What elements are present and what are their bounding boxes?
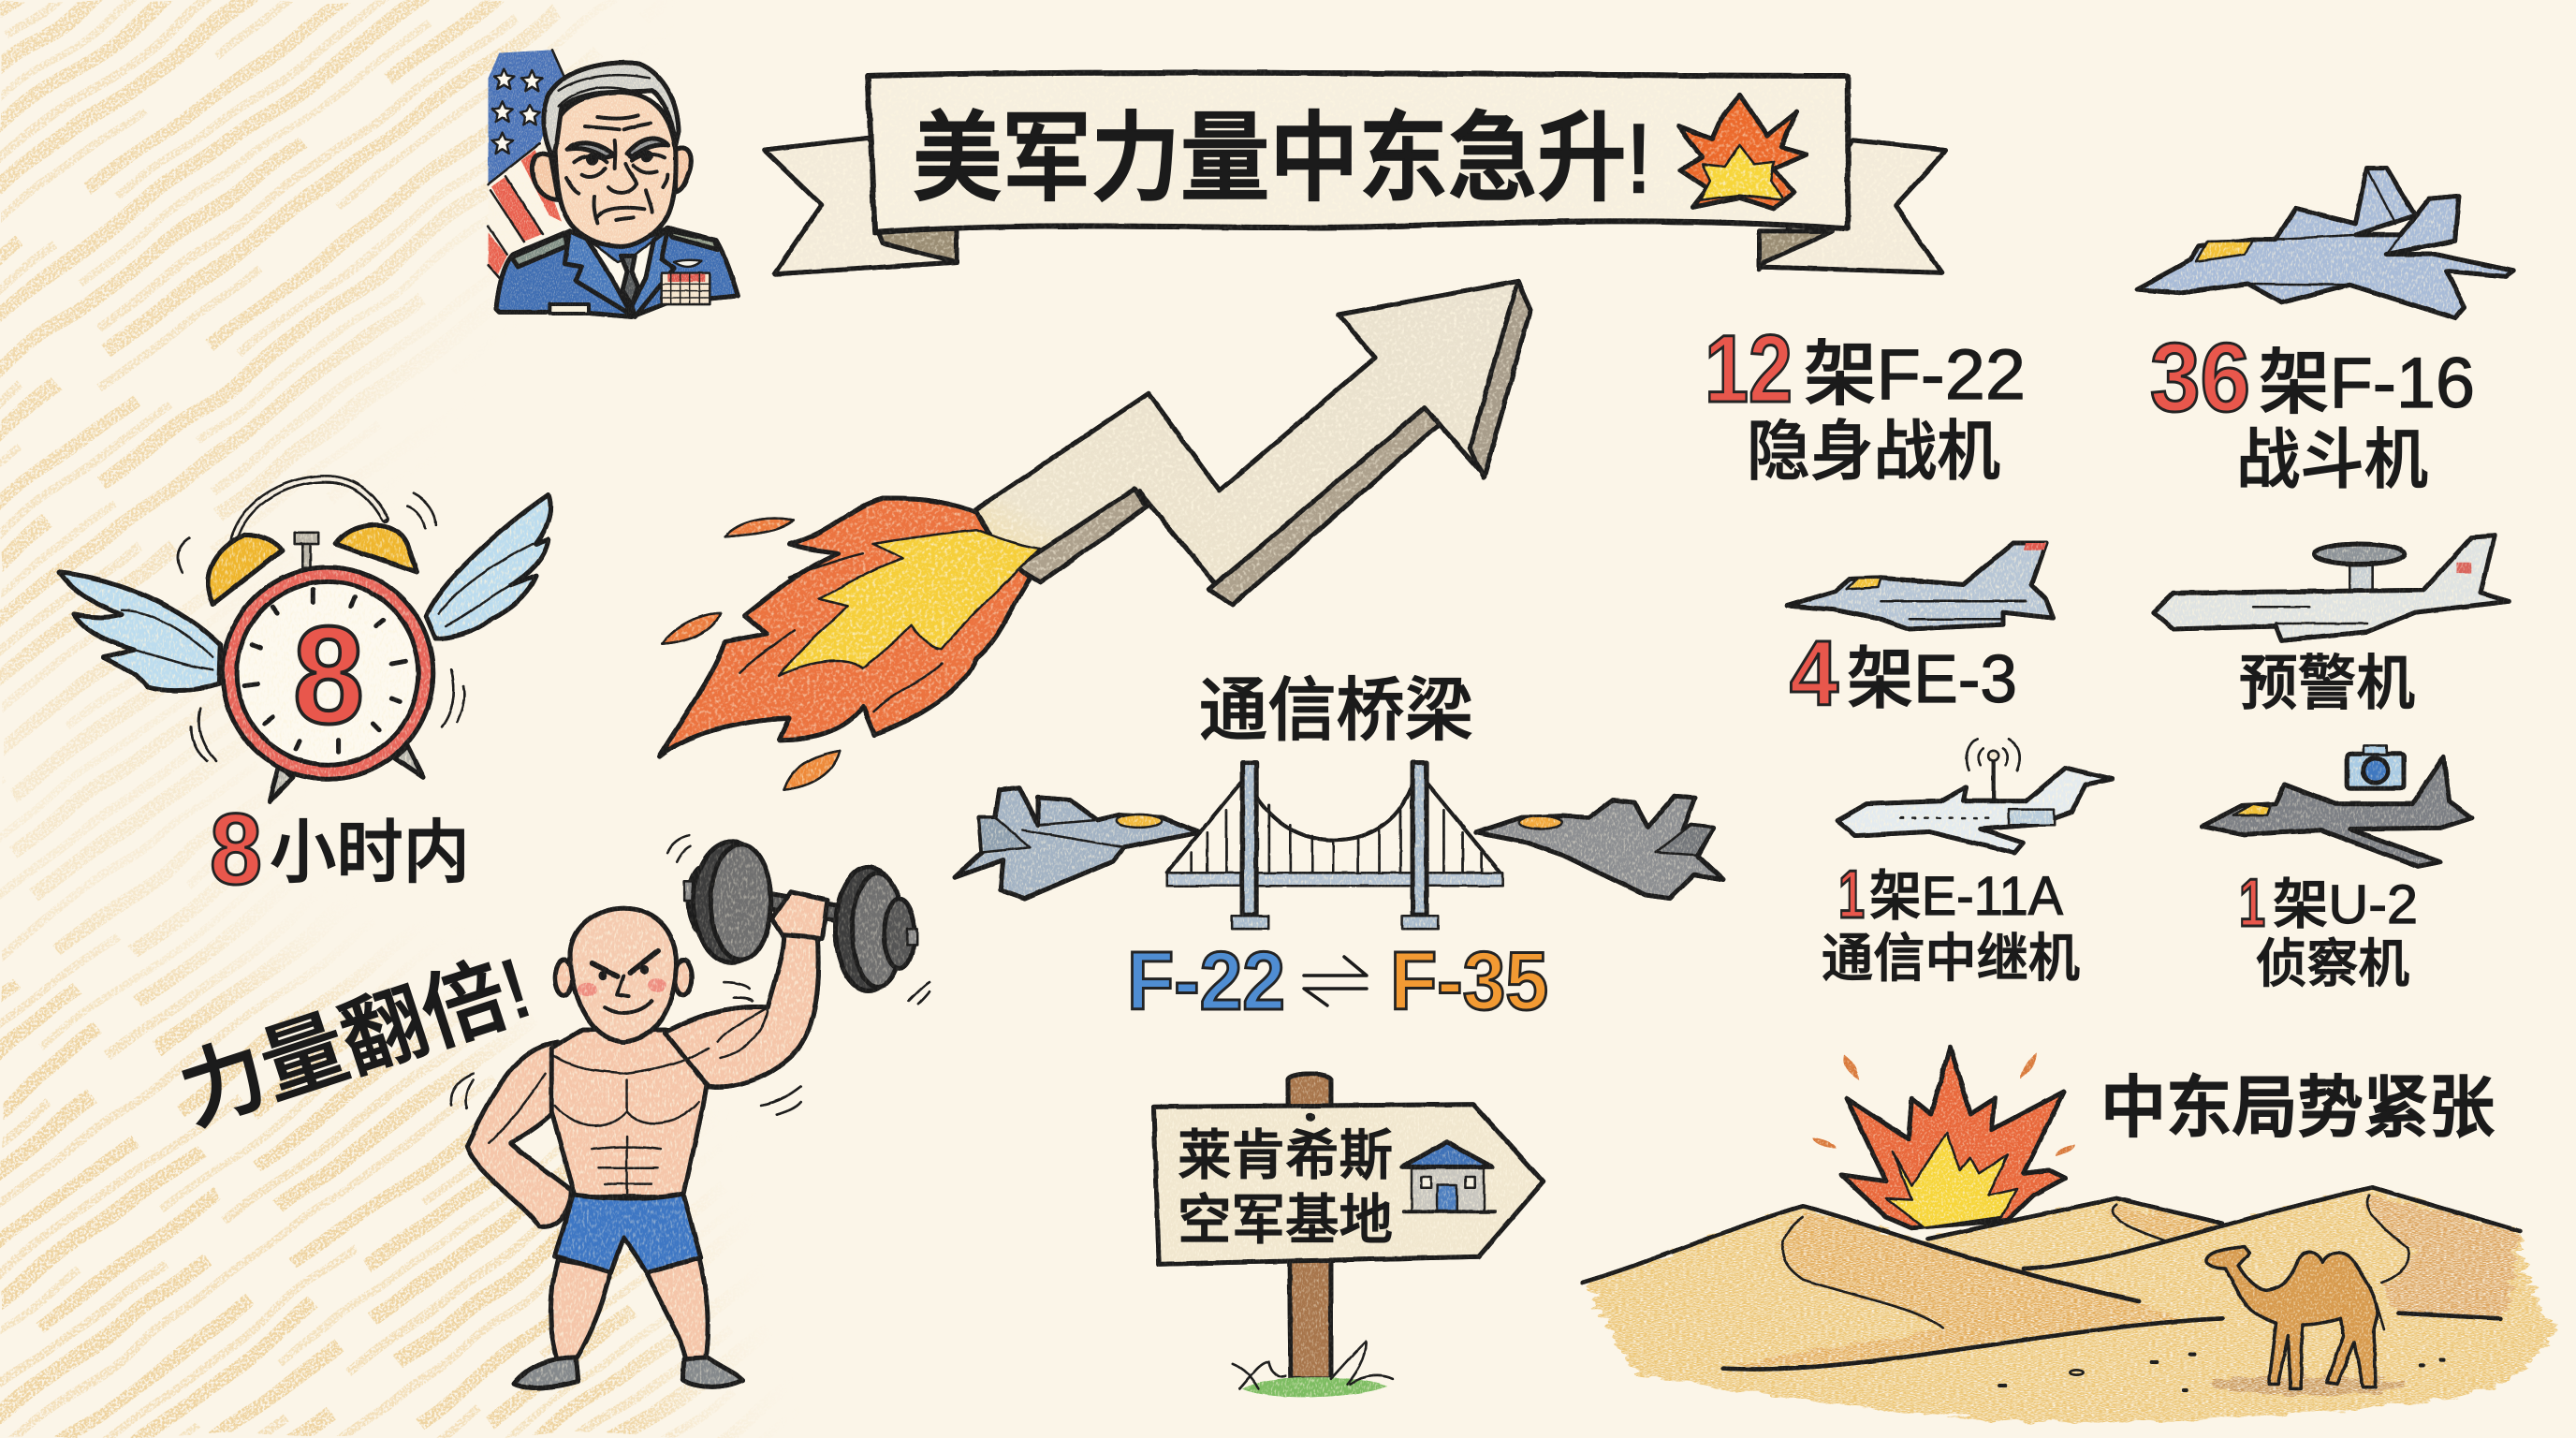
label: 架E-3: 架E-3 <box>1847 642 2017 717</box>
dune lines and camel <box>1582 1187 2520 1390</box>
label: 1架E-11A 通信中继机: 通信中继机 <box>1822 929 2080 988</box>
uniform <box>496 227 738 316</box>
bridge with two jets <box>955 763 1723 929</box>
E-11A relay plane illustration <box>1837 739 2113 853</box>
general portrait with flag <box>489 50 738 316</box>
label: 12架F-22 隐身战机 <box>1705 315 2026 488</box>
flying alarm clock <box>60 479 550 801</box>
grass <box>1242 1377 1387 1397</box>
feet <box>270 765 293 801</box>
label: F-22 ⇌ F-35 <box>1127 934 1548 1027</box>
label: 1架E-11A 通信中继机: 架E-11A <box>1869 866 2063 927</box>
flame flakes lower <box>783 751 840 790</box>
label: 12架F-22 隐身战机: 12 <box>1705 315 1793 422</box>
label: F-22 ⇌ F-35: F-22 <box>1127 934 1285 1027</box>
flag <box>489 50 564 278</box>
motion lines <box>178 493 464 761</box>
face <box>555 92 676 246</box>
left arm <box>467 1042 572 1226</box>
icon: camera <box>2347 745 2404 788</box>
label: 1架U-2 侦察机: 1 <box>2239 866 2265 941</box>
pebbles <box>2000 1355 2444 1390</box>
bodybuilder with dumbbell <box>450 835 929 1387</box>
label: F-22 ⇌ F-35: F-35 <box>1390 934 1548 1027</box>
handle and bells <box>233 479 386 544</box>
label: 1架E-11A 通信中继机: 1 <box>1838 858 1865 932</box>
head <box>570 908 676 1042</box>
left wing <box>60 572 221 691</box>
sign text: 莱肯希斯 <box>1178 1125 1393 1186</box>
E-3 AWACS illustration <box>2154 536 2509 640</box>
sand dunes fill <box>1586 1187 2558 1422</box>
F-22 stealth fighter illustration <box>2137 169 2513 318</box>
torso <box>551 1030 714 1196</box>
F-16 fighter illustration <box>1787 543 2053 629</box>
hair <box>544 63 679 157</box>
label: 1架U-2 侦察机 <box>2239 866 2418 993</box>
shoes <box>514 1357 578 1387</box>
clock number 8: 8 <box>293 598 364 753</box>
flame <box>659 499 1040 756</box>
label: 36架F-16 战斗机: 架F-16 <box>2259 344 2475 423</box>
desert scene with explosion and camel <box>1582 1047 2558 1422</box>
rising arrow <box>972 281 1530 605</box>
face <box>593 950 658 976</box>
right wing <box>426 494 550 638</box>
label: 8小时内: 8 <box>210 792 262 905</box>
label: 12架F-22 隐身战机: 隐身战机 <box>1747 415 2000 488</box>
ears <box>532 154 559 199</box>
clock ring and face <box>223 567 433 779</box>
label: 1架U-2 侦察机: 架U-2 <box>2273 874 2418 935</box>
label: 8小时内 <box>210 792 470 905</box>
suspension bridge <box>1167 763 1503 929</box>
legs <box>550 1259 611 1360</box>
label: 36架F-16 战斗机: 36 <box>2150 324 2250 433</box>
icon: house <box>1412 1167 1484 1211</box>
shorts <box>555 1194 701 1272</box>
label: 36架F-16 战斗机 <box>2150 324 2475 496</box>
title text: 美军力量中东急升! <box>913 105 1651 213</box>
F-35 jet right <box>1476 796 1723 899</box>
label: 1架E-11A 通信中继机 <box>1822 858 2080 988</box>
label: 4架E-3: 4 <box>1790 622 1838 725</box>
dumbbell <box>684 842 917 990</box>
label: 36架F-16 战斗机: 战斗机 <box>2236 423 2428 496</box>
tick marks <box>244 590 406 752</box>
banner ribbon <box>765 73 1946 274</box>
title banner <box>765 73 1946 274</box>
explosion <box>1812 1047 2075 1228</box>
raised arm <box>665 929 819 1087</box>
signpost: Langley base <box>1153 1074 1544 1397</box>
icon: two way arrows <box>1304 957 1367 1005</box>
F-22 jet left <box>955 787 1199 899</box>
label: 力量翻倍!: 力量翻倍! <box>169 941 541 1142</box>
camel <box>2206 1247 2378 1388</box>
muscle lines <box>489 1007 768 1194</box>
label: 通信桥梁: 通信桥梁 <box>1199 671 1473 749</box>
crayon texture at left <box>0 0 745 1438</box>
brows <box>567 143 615 157</box>
label: 预警机: 预警机 <box>2239 650 2415 717</box>
label: 中东局势紧张: 中东局势紧张 <box>2100 1071 2495 1146</box>
icon: explosion in title <box>1678 95 1807 209</box>
U-2 recon plane illustration <box>2202 745 2472 867</box>
flame flakes <box>725 519 794 536</box>
ears <box>555 961 573 995</box>
label: 12架F-22 隐身战机: 架F-22 <box>1804 335 2026 415</box>
signpost: Langley base: 空军基地 <box>1178 1190 1393 1251</box>
label: 1架U-2 侦察机: 侦察机 <box>2256 934 2409 993</box>
motion lines <box>450 835 929 1115</box>
eyes and wrinkles <box>586 153 598 166</box>
label: 8小时内: 小时内 <box>270 814 470 891</box>
